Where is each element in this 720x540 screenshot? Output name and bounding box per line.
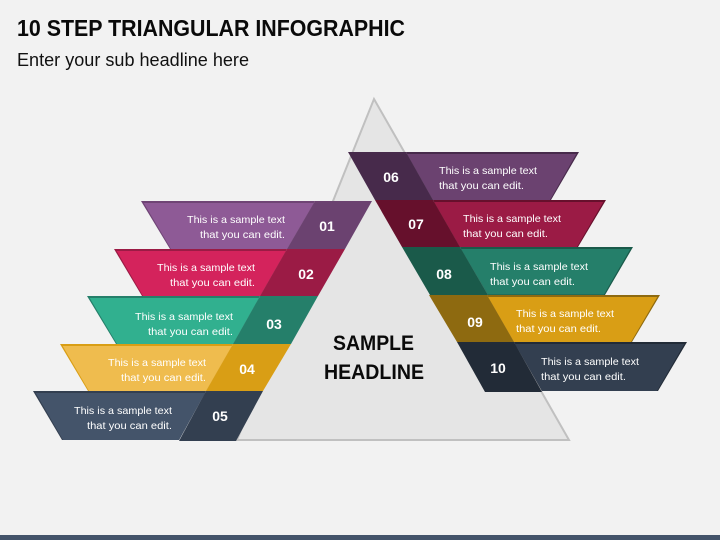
step 02 band: that you can edit. [170,277,255,289]
step 05 band [33,391,263,441]
step 03 band: that you can edit. [148,326,233,338]
footer bar [0,535,720,540]
title: 10 STEP TRIANGULAR INFOGRAPHIC [17,15,405,41]
step 07 band: 07 [408,216,424,232]
subtitle: Enter your sub headline here [17,50,249,70]
central triangle [237,99,569,440]
step 07 band [375,200,606,247]
step 04 band: that you can edit. [121,372,206,384]
step 01 band: 01 [319,218,335,234]
step 10 band: This is a sample text [541,356,639,368]
step 06 band [348,152,579,200]
step 06 band: This is a sample text [439,165,537,177]
step 01 band: This is a sample text [187,214,285,226]
step 02 band [114,249,345,296]
step 05 band: 05 [212,408,228,424]
step 09 band: 09 [467,314,483,330]
step 04 band: This is a sample text [108,357,206,369]
step 02 band: 02 [298,266,314,282]
step 08 band: 08 [436,266,452,282]
step 01 band: that you can edit. [200,229,285,241]
step 10 band: that you can edit. [541,371,626,383]
step 05 band: that you can edit. [87,420,172,432]
step 05 band: This is a sample text [74,405,172,417]
step 09 band: that you can edit. [516,323,601,335]
step 04 band [60,344,291,391]
step 02 band: This is a sample text [157,262,255,274]
step 06 band: 06 [383,169,399,185]
step 03 band: 03 [266,316,282,332]
step 03 band [87,296,318,344]
step 09 band: This is a sample text [516,308,614,320]
step 04 band: 04 [239,361,255,377]
step 07 band: that you can edit. [463,228,548,240]
central headline: HEADLINE [324,361,424,384]
step 10 band: 10 [490,360,506,376]
step 08 band: This is a sample text [490,261,588,273]
step 09 band [429,295,660,342]
step 08 band [402,247,633,295]
central headline: SAMPLE [333,332,414,355]
step 03 band: This is a sample text [135,311,233,323]
step 08 band: that you can edit. [490,276,575,288]
central headline [324,332,424,384]
step 10 band [457,342,687,392]
step 07 band: This is a sample text [463,213,561,225]
step 01 band [141,201,372,249]
step 06 band: that you can edit. [439,180,524,192]
